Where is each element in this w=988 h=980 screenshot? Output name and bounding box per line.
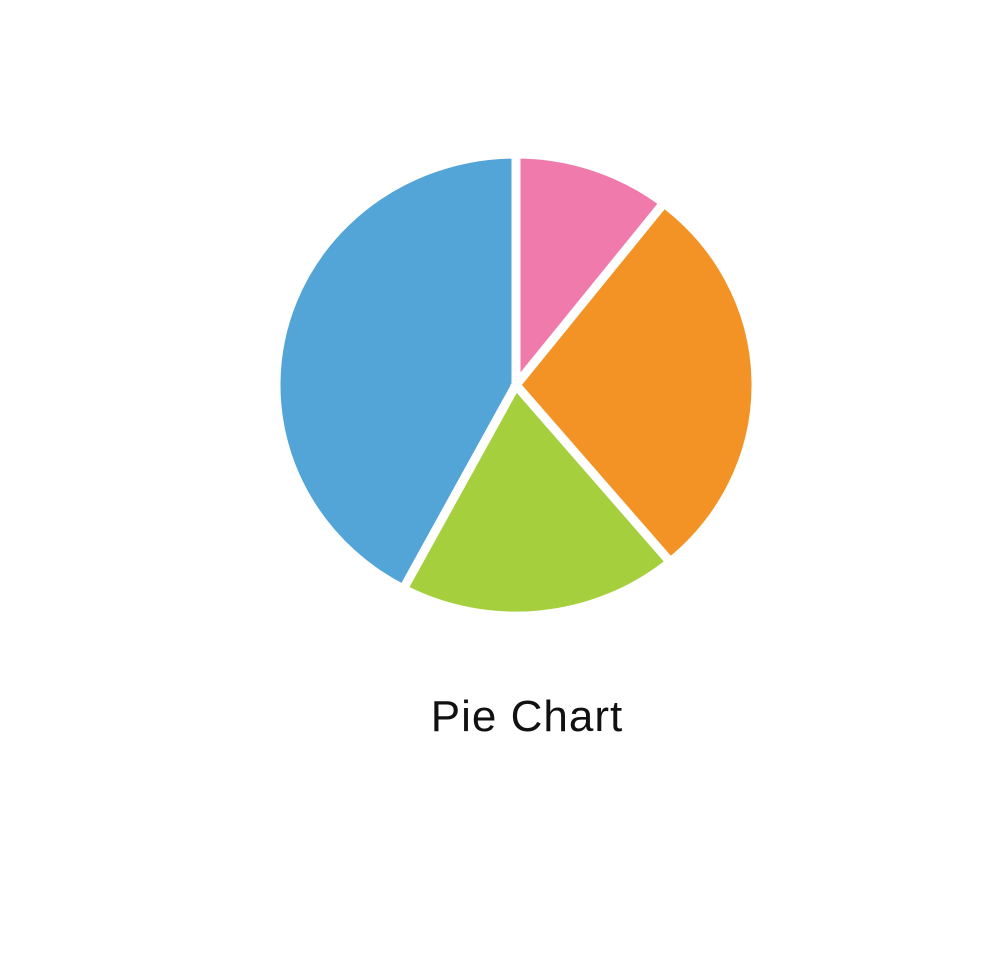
slice: green bbox=[403, 385, 670, 616]
slice: blue bbox=[276, 154, 516, 589]
slice: orange bbox=[516, 203, 756, 562]
slice: pink bbox=[516, 154, 664, 385]
caption: Pie Chart bbox=[431, 692, 623, 741]
